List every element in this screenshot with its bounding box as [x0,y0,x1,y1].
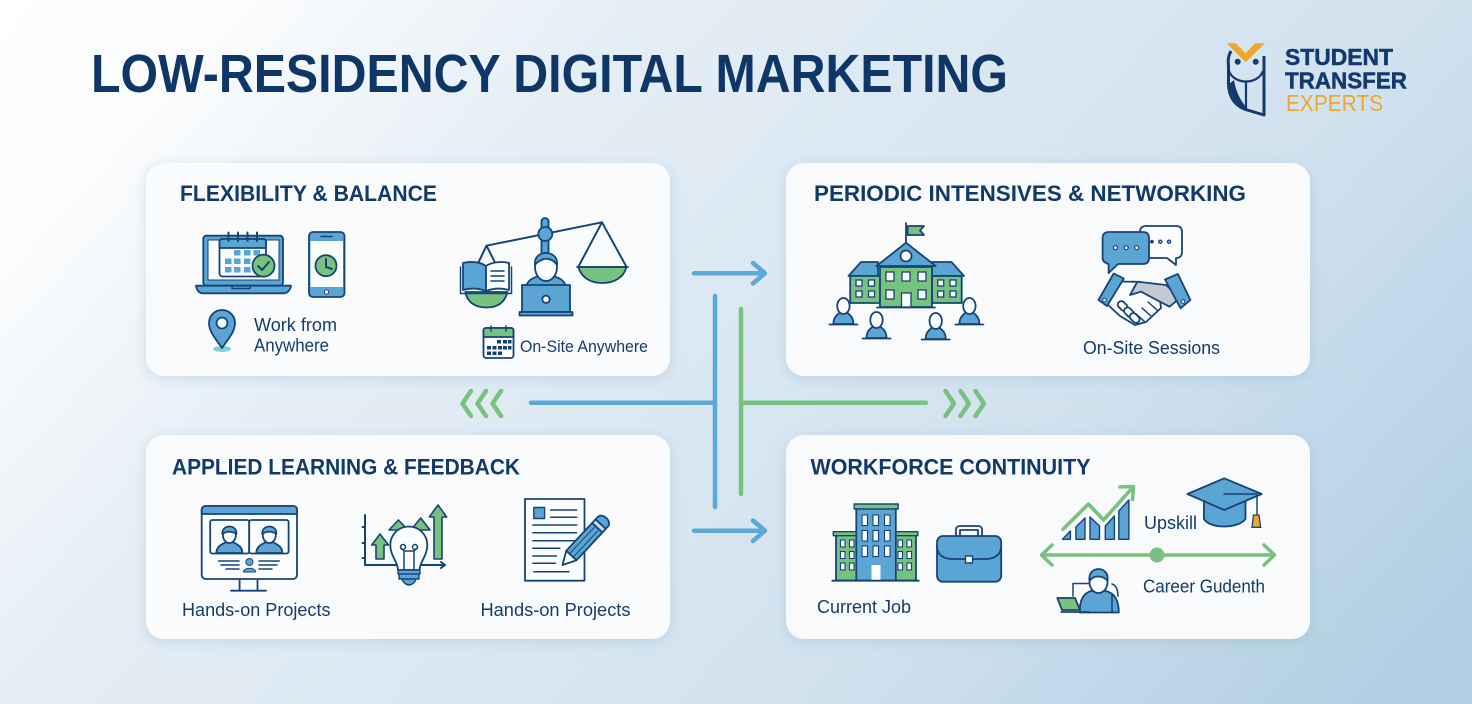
connector: green branch [741,309,926,494]
icon: attendee 4 [955,298,983,324]
heading: APPLIED LEARNING & FEEDBACK [172,454,520,479]
heading: FLEXIBILITY & BALANCE [180,181,437,206]
icon: student with laptop [1057,569,1119,612]
panel: workforce continuity [786,435,1310,639]
panel card [786,435,1310,639]
label: on-site anywhere: On-Site Anywhere [520,338,648,356]
logo wordmark: EXPERTS [1286,90,1383,116]
chevrons: right [946,391,984,416]
panel: flexibility and balance [146,163,670,376]
connector arrow: bottom right [694,520,765,541]
label: work from anywhere: Work from [254,315,337,335]
icon: growth chart [1062,486,1134,539]
icon: briefcase [937,526,1001,582]
icon: lightbulb with growth arrows [362,505,447,585]
icon: office building [832,504,919,581]
label: hands-on projects right: Hands-on Projects [480,600,630,620]
icon: chat bubbles [1103,226,1182,273]
logo wordmark: STUDENT [1285,44,1393,70]
label: current job: Current Job [817,597,911,617]
icon: graduation cap [1187,478,1262,527]
panel card [786,163,1310,376]
icon: campus building [848,223,964,308]
icon: attendee 1 [829,298,857,324]
icon: location pin [209,310,235,352]
icon: handshake [1098,274,1190,325]
icon: attendee 3 [922,313,950,340]
panel: periodic intensives and networking [786,163,1310,376]
icon: laptop with calendar [196,232,291,293]
icon: attendee 2 [862,312,890,338]
connector arrow: top right [694,263,765,284]
chevrons: left [462,391,501,416]
icon: document with pencil [525,499,611,581]
icon: phone with clock [309,232,344,297]
logo: Student Transfer Experts [1227,43,1407,116]
label: on-site sessions: On-Site Sessions [1083,338,1220,358]
logo wordmark: TRANSFER [1285,67,1407,93]
heading: PERIODIC INTENSIVES & NETWORKING [814,181,1246,206]
icon: video call monitor [202,506,297,591]
label: upskill: Upskill [1144,513,1197,533]
panel: applied learning and feedback [146,435,670,639]
title: LOW-RESIDENCY DIGITAL MARKETING [91,44,1008,104]
panel card [146,163,670,376]
icon: owl [1227,43,1265,115]
heading: WORKFORCE CONTINUITY [810,454,1091,479]
timeline double arrow [1042,545,1274,565]
label: career gudenth: Career Gudenth [1143,576,1265,596]
icon: small calendar [484,326,514,358]
connector: blue branch [531,296,715,507]
label: hands-on projects left: Hands-on Projects [182,600,330,620]
icon: balance scale with book and student [460,218,628,316]
panel card [146,435,670,639]
label: work from anywhere: Anywhere [254,336,329,356]
